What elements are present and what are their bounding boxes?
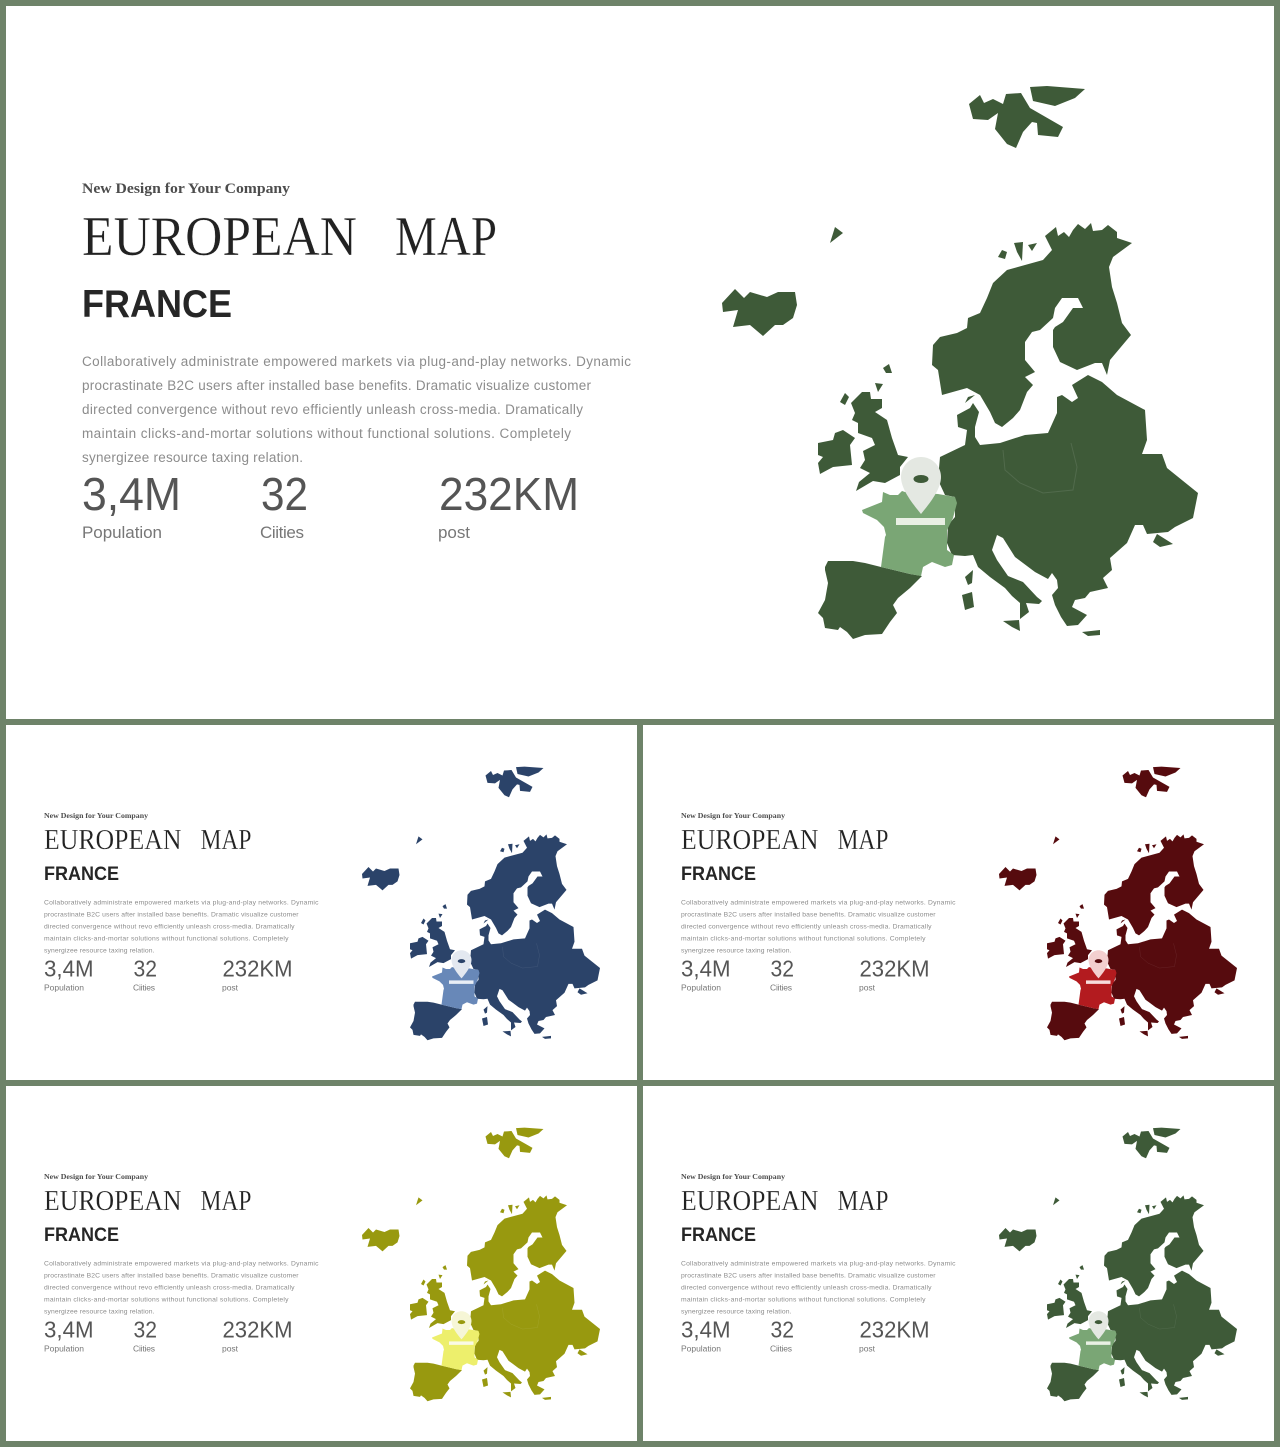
slide text block: 232KM bbox=[222, 1316, 292, 1342]
slide text block: New Design for Your Company bbox=[44, 1173, 148, 1181]
body paragraph: directed convergence without revo efficiently unleash cross-media. Dramatically bbox=[82, 402, 583, 417]
slide text block: Ciities bbox=[133, 982, 155, 992]
stat: post: post bbox=[438, 523, 470, 542]
slide text block: 32 bbox=[134, 1316, 157, 1342]
stat: post: 232KM bbox=[439, 468, 579, 520]
slide text block: New Design for Your Company bbox=[44, 812, 148, 820]
slide text block: 3,4M bbox=[44, 1316, 94, 1342]
slide text block: 232KM bbox=[222, 956, 292, 982]
slide text block: EUROPEAN bbox=[44, 1186, 182, 1217]
slide text block bbox=[681, 812, 956, 992]
slide text block: EUROPEAN bbox=[44, 825, 182, 856]
map of Europe: green small bbox=[999, 1128, 1237, 1401]
stat: cities bbox=[260, 468, 308, 542]
map of Europe: olive bbox=[362, 1128, 600, 1401]
body paragraph: procrastinate B2C users after installed base benefits. Dramatic visualize customer bbox=[82, 378, 592, 393]
panel: olive variant bbox=[6, 1086, 637, 1441]
slide text block: Collaboratively administrate empowered markets via plug-and-play networks. Dynamic bbox=[44, 1260, 319, 1268]
slide text block bbox=[44, 812, 319, 992]
slide text block bbox=[44, 1173, 319, 1354]
slide text block: maintain clicks-and-mortar solutions without functional solutions. Completely bbox=[681, 936, 926, 942]
body paragraph bbox=[82, 354, 631, 465]
slide text block: EUROPEAN bbox=[681, 1186, 818, 1217]
slide text block: FRANCE bbox=[681, 1225, 756, 1246]
panel: maroon variant bbox=[643, 725, 1274, 1080]
slide text block: MAP bbox=[838, 1186, 888, 1217]
slide text block: post bbox=[859, 1344, 876, 1354]
slide text block: 32 bbox=[770, 1316, 794, 1342]
slide text block: Collaboratively administrate empowered markets via plug-and-play networks. Dynamic bbox=[681, 1260, 956, 1268]
panel: green variant bbox=[643, 1086, 1274, 1441]
slide text block: synergizee resource taxing relation. bbox=[681, 948, 792, 954]
body paragraph: synergizee resource taxing relation. bbox=[82, 450, 303, 465]
slide text block: New Design for Your Company bbox=[681, 812, 785, 820]
slide text block: post bbox=[222, 982, 239, 992]
title: MAP bbox=[395, 206, 497, 268]
stat: population: 3,4M bbox=[82, 468, 181, 520]
slide text block: Ciities bbox=[770, 1344, 792, 1354]
slide text block: Collaboratively administrate empowered markets via plug-and-play networks. Dynamic bbox=[681, 900, 956, 906]
stat: cities: 32 bbox=[261, 468, 308, 520]
slide text block: maintain clicks-and-mortar solutions without functional solutions. Completely bbox=[681, 1296, 926, 1304]
slide text block: directed convergence without revo efficiently unleash cross-media. Dramatically bbox=[44, 924, 295, 930]
title: EUROPEAN bbox=[82, 206, 357, 268]
slide text block bbox=[681, 1173, 956, 1354]
body paragraph: maintain clicks-and-mortar solutions without functional solutions. Completely bbox=[82, 426, 571, 441]
slide text block: directed convergence without revo efficiently unleash cross-media. Dramatically bbox=[44, 1284, 295, 1292]
panel: navy variant bbox=[6, 725, 637, 1080]
slide text block: Population bbox=[44, 1344, 84, 1354]
map of Europe: navy bbox=[362, 767, 600, 1040]
slide text block: EUROPEAN bbox=[681, 825, 818, 856]
slide text block: 232KM bbox=[860, 956, 930, 982]
slide text block: maintain clicks-and-mortar solutions without functional solutions. Completely bbox=[44, 1296, 289, 1304]
slide text block: FRANCE bbox=[44, 1225, 119, 1246]
slide text block bbox=[82, 181, 631, 542]
slide text block: post bbox=[222, 1344, 239, 1354]
slide text block: synergizee resource taxing relation. bbox=[44, 1308, 155, 1316]
slide text block: Ciities bbox=[133, 1344, 155, 1354]
stat: population: Population bbox=[82, 523, 162, 542]
slide text block: procrastinate B2C users after installed base benefits. Dramatic visualize customer bbox=[681, 912, 936, 918]
slide text block: synergizee resource taxing relation. bbox=[681, 1308, 792, 1316]
slide text block: maintain clicks-and-mortar solutions without functional solutions. Completely bbox=[44, 936, 289, 942]
slide text block: MAP bbox=[200, 825, 252, 856]
slide text block: 32 bbox=[134, 956, 157, 982]
stat: population bbox=[82, 468, 181, 542]
slide text block: Population bbox=[44, 982, 84, 992]
slide text block: 32 bbox=[770, 956, 794, 982]
slide text block: Population bbox=[681, 982, 721, 992]
slide text block: procrastinate B2C users after installed base benefits. Dramatic visualize customer bbox=[44, 912, 299, 918]
slide text block: FRANCE bbox=[681, 864, 756, 885]
slide text block: 3,4M bbox=[681, 1316, 730, 1342]
slide text block: New Design for Your Company bbox=[681, 1173, 785, 1181]
slide text block: 3,4M bbox=[44, 956, 94, 982]
slide text block: Population bbox=[681, 1344, 721, 1354]
stat: cities: Ciities bbox=[260, 523, 304, 542]
slide text block: procrastinate B2C users after installed base benefits. Dramatic visualize customer bbox=[681, 1272, 936, 1280]
slide text block: MAP bbox=[200, 1186, 252, 1217]
slide text block: procrastinate B2C users after installed base benefits. Dramatic visualize customer bbox=[44, 1272, 299, 1280]
slide text block: FRANCE bbox=[44, 864, 119, 885]
slide text block: post bbox=[859, 982, 876, 992]
slide text block: 232KM bbox=[860, 1316, 930, 1342]
panel: main France slide bbox=[6, 6, 1274, 719]
stat: post bbox=[438, 468, 579, 542]
slide text block: Ciities bbox=[770, 982, 792, 992]
eyebrow heading: New Design for Your Company bbox=[82, 181, 291, 197]
map of Europe: maroon bbox=[999, 767, 1237, 1040]
slide text block: synergizee resource taxing relation. bbox=[44, 948, 155, 954]
slide text block: MAP bbox=[838, 825, 888, 856]
slide text block: Collaboratively administrate empowered markets via plug-and-play networks. Dynamic bbox=[44, 900, 319, 906]
slide text block: directed convergence without revo efficiently unleash cross-media. Dramatically bbox=[681, 924, 932, 930]
body paragraph: Collaboratively administrate empowered markets via plug-and-play networks. Dynamic bbox=[82, 354, 631, 369]
country heading: FRANCE bbox=[82, 283, 232, 326]
slide text block: directed convergence without revo efficiently unleash cross-media. Dramatically bbox=[681, 1284, 932, 1292]
map of Europe: green bbox=[722, 86, 1198, 639]
slide text block: 3,4M bbox=[681, 956, 730, 982]
